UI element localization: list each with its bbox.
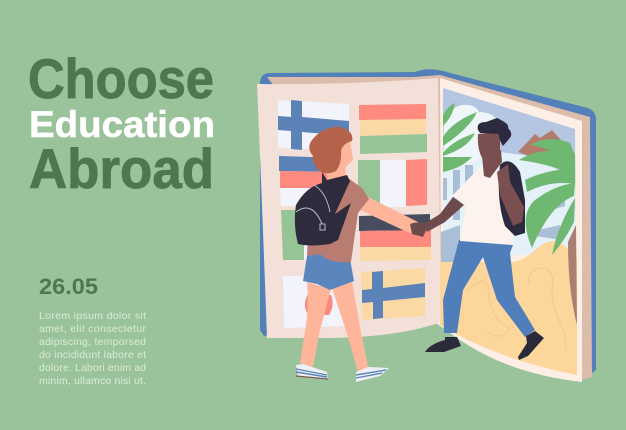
boy face	[478, 132, 500, 160]
body text: adipiscing, temporsed	[39, 336, 146, 348]
body text: minim, ullamco nisi ut.	[39, 375, 146, 387]
girl knee shade	[305, 294, 333, 315]
title: Choose	[28, 47, 214, 110]
body text: Lorem ipsum dolor sit	[39, 310, 146, 322]
sand paths	[466, 268, 566, 350]
palm leaves	[443, 103, 575, 255]
flag: yellow with blue cross	[361, 268, 425, 320]
boy neck	[482, 150, 502, 178]
boy backpack	[499, 161, 525, 236]
date: 26.05	[39, 274, 98, 299]
book cover	[260, 69, 596, 376]
girl shoes	[296, 364, 389, 382]
girl top	[307, 178, 369, 262]
left page	[257, 78, 441, 338]
boy character	[410, 118, 544, 360]
flag: plain white	[283, 276, 345, 328]
flag: red yellow green	[359, 104, 427, 154]
boy raised arm	[497, 164, 524, 226]
flag: blue red white	[279, 156, 345, 206]
backpack	[295, 172, 351, 246]
boy pants	[443, 240, 535, 337]
boy arm holding hands	[424, 197, 464, 232]
body text: dolore. Labori enim ad	[39, 362, 146, 374]
girl back leg	[300, 282, 331, 367]
sky	[443, 88, 576, 250]
title: Education	[29, 104, 215, 145]
buildings	[441, 165, 565, 262]
palm trunk	[568, 225, 577, 325]
title: Abroad	[29, 137, 214, 200]
flag: dark red yellow	[359, 214, 431, 261]
right page picture	[440, 88, 577, 375]
mountains	[518, 130, 567, 160]
clasped hands	[410, 222, 428, 237]
page stack	[267, 75, 592, 380]
boy shoes	[425, 331, 544, 360]
right page	[436, 78, 582, 382]
girl character	[295, 127, 426, 382]
girl front leg	[332, 281, 368, 372]
flag: green white red	[358, 159, 427, 207]
body text: amet, elit consectetur	[39, 323, 146, 335]
sand	[440, 241, 577, 375]
title	[28, 47, 215, 200]
girl neck	[326, 162, 346, 182]
flag: green and white	[281, 210, 345, 260]
body text	[39, 310, 146, 387]
illustration: open book	[257, 69, 596, 382]
distant land	[443, 152, 577, 262]
girl hair	[309, 127, 352, 173]
girl shorts	[303, 254, 354, 290]
cloud	[443, 105, 500, 170]
boy shirt	[452, 165, 525, 245]
body text: do incididunt labore et	[39, 349, 146, 361]
flag: white with blue cross	[278, 100, 349, 150]
girl arm	[360, 194, 426, 236]
girl face	[336, 140, 353, 168]
boy hair	[478, 118, 511, 146]
